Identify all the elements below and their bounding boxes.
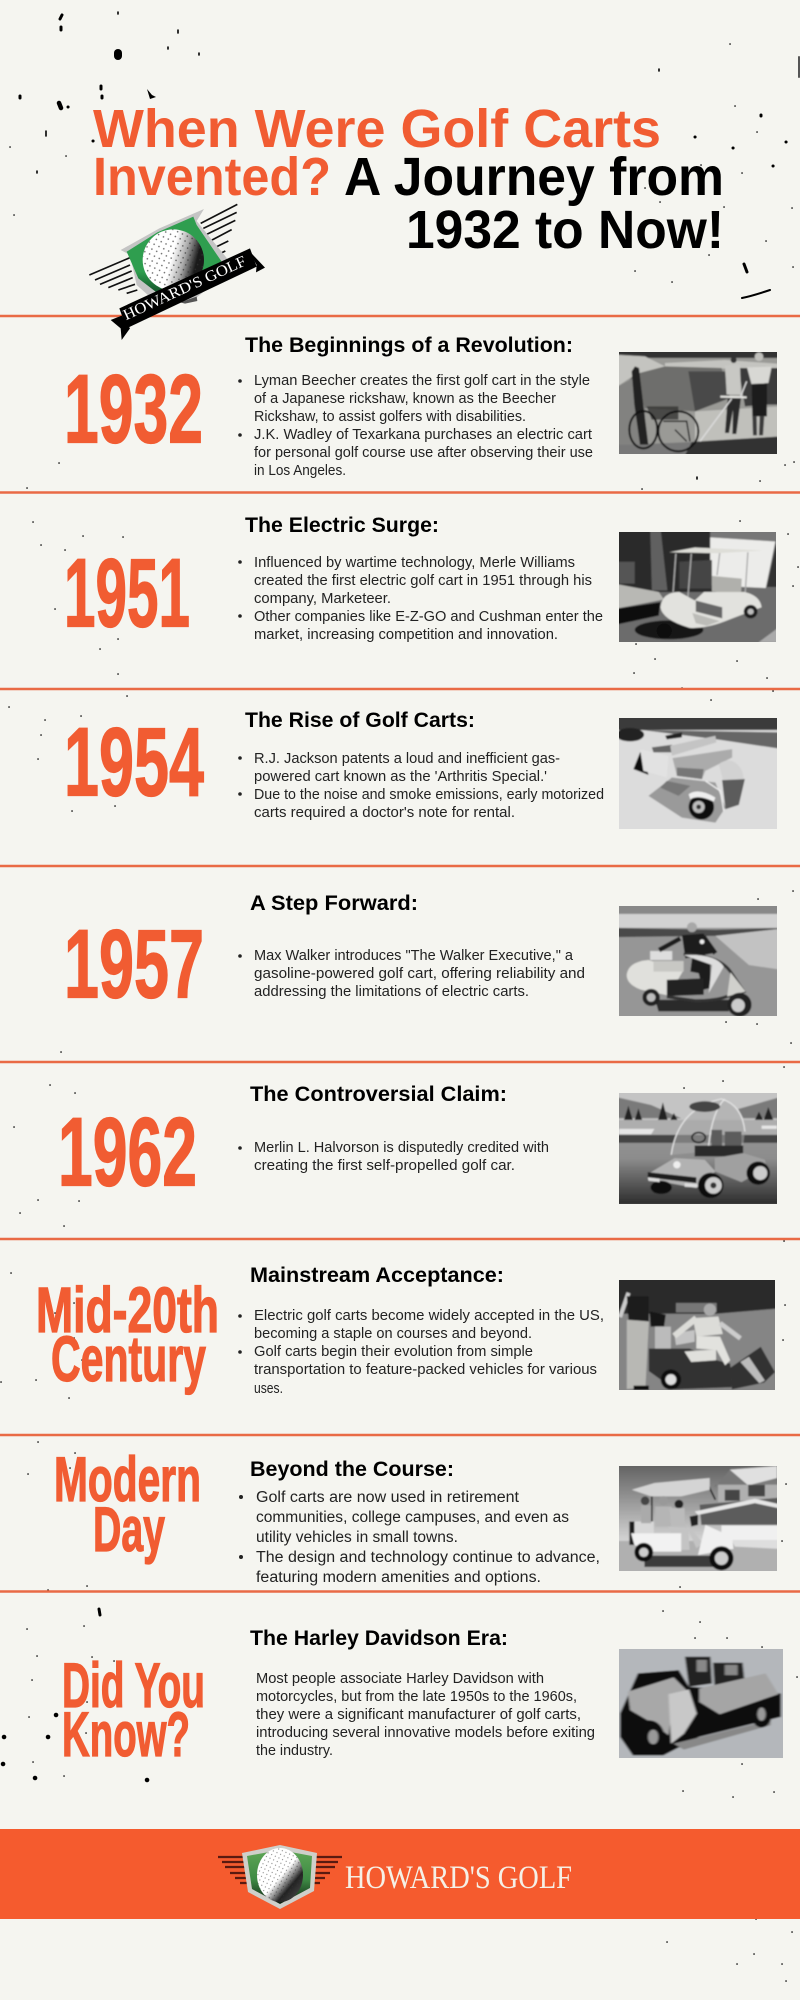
bullet text: Golf carts begin their evolution from simple [254,1344,533,1360]
period label: Mid-20th [36,1274,219,1346]
callout label: Know? [62,1700,190,1770]
panel: 1932 [64,334,782,479]
paragraph [256,1671,595,1759]
title: 1932 to Now! [406,200,724,260]
bullet text: The design and technology continue to advance, [256,1549,600,1566]
footer banner [0,1829,800,1919]
year: 1962 [58,1098,197,1206]
heading: The Controversial Claim: [250,1083,507,1106]
bullet text: addressing the limitations of electric carts. [254,984,529,1000]
bullet text: uses. [254,1381,283,1397]
bullet text: company, Marketeer. [254,591,391,607]
photo: modern cart before a house [619,1466,777,1571]
photo: white Marketeer cart [619,532,776,642]
title: A Journey from [344,147,724,207]
photo: Harley Davidson golf cart [619,1649,783,1758]
heading: The Beginnings of a Revolution: [245,334,573,357]
photo: domed futuristic golf car [619,1093,777,1204]
bullet text [239,1489,600,1586]
bullet text: creating the first self-propelled golf car. [254,1158,515,1174]
bullet text: becoming a staple on courses and beyond. [254,1326,532,1342]
bullet text [238,948,585,1000]
logo: Howard's Golf badge [89,204,265,340]
heading: The Rise of Golf Carts: [245,709,475,732]
bullet text: featuring modern amenities and options. [256,1569,541,1586]
paragraph: Most people associate Harley Davidson with [256,1671,544,1687]
title [93,99,724,260]
footer brand name: HOWARD'S GOLF [345,1860,572,1896]
photo: gas-powered Arthritis Special cart [619,718,777,829]
heading: The Electric Surge: [245,514,439,537]
bullet text: of a Japanese rickshaw, known as the Beecher [254,391,556,407]
callout label: Did You [62,1651,205,1721]
bullet text: for personal golf course use after observing their use [254,445,593,461]
panel: 1957 [64,892,782,1018]
year: 1932 [64,354,203,464]
panel: 1962 [58,1083,782,1206]
bullet text: utility vehicles in small towns. [256,1529,458,1546]
bullet text: carts required a doctor's note for rental. [254,805,515,821]
period label: Century [51,1323,206,1395]
panel: 1951 [64,514,786,648]
bullet text: gasoline-powered golf cart, offering reliability and [254,966,585,982]
bullet text: Merlin L. Halvorson is disputedly credited with [254,1140,549,1156]
panel: Did You Know? [62,1627,786,1770]
period label: Modern [54,1445,201,1515]
year: 1951 [64,538,190,648]
heading: A Step Forward: [250,892,418,915]
bullet text: Other companies like E-Z-GO and Cushman enter the [254,609,603,625]
bullet text: J.K. Wadley of Texarkana purchases an electric cart [254,427,592,443]
paragraph: the industry. [256,1743,333,1759]
bullet text: Max Walker introduces "The Walker Executive," a [254,948,574,964]
panel: Mid-20th Century [36,1264,784,1397]
callout label [62,1651,205,1770]
logo: Howard's Golf badge: HOWARD'S GOLF [121,253,249,324]
bullet text: R.J. Jackson patents a loud and inefficient gas- [254,751,560,767]
bullet text: Golf carts are now used in retirement [256,1489,520,1506]
panel: Modern Day [54,1445,782,1586]
bullet text [238,1308,604,1397]
bullet text [238,1140,549,1174]
paragraph: introducing several innovative models before exiting [256,1725,595,1741]
title: Invented? [93,147,331,207]
photo: Max Walker on the Walker Executive [619,906,777,1016]
heading: The Harley Davidson Era: [250,1627,508,1650]
period label [54,1445,201,1565]
panel: 1954 [64,708,782,831]
year: 1954 [64,708,204,816]
footer logo badge [218,1845,342,1909]
bullet text [238,555,603,643]
period label [36,1274,219,1395]
bullet text: market, increasing competition and innovation. [254,627,558,643]
paragraph: motorcycles, but from the late 1950s to the 1960s, [256,1689,577,1705]
bullet text: Lyman Beecher creates the first golf cart in the style [254,373,590,389]
bullet text: in Los Angeles. [254,463,346,479]
bullet text: created the first electric golf cart in 1951 through his [254,573,592,589]
bullet text: communities, college campuses, and even as [256,1509,569,1526]
paragraph: they were a significant manufacturer of golf carts, [256,1707,581,1723]
heading: Mainstream Acceptance: [250,1264,504,1287]
bullet text: Influenced by wartime technology, Merle Williams [254,555,575,571]
section divider lines [0,316,800,1592]
bullet text: Electric golf carts become widely accepted in the US, [254,1308,604,1324]
period label: Day [93,1495,165,1565]
title: When Were Golf Carts [93,99,661,159]
bullet text [238,373,593,479]
bullet text: powered cart known as the 'Arthritis Special.' [254,769,547,785]
bullet text [238,751,604,821]
year: 1957 [64,910,204,1018]
bullet text: Rickshaw, to assist golfers with disabilities. [254,409,526,425]
bullet text: transportation to feature-packed vehicles for various [254,1362,597,1378]
photo: Beecher rickshaw [619,352,777,454]
heading: Beyond the Course: [250,1458,454,1481]
photo: couple with golf cart [619,1280,775,1390]
bullet text: Due to the noise and smoke emissions, early motorized [254,787,604,803]
